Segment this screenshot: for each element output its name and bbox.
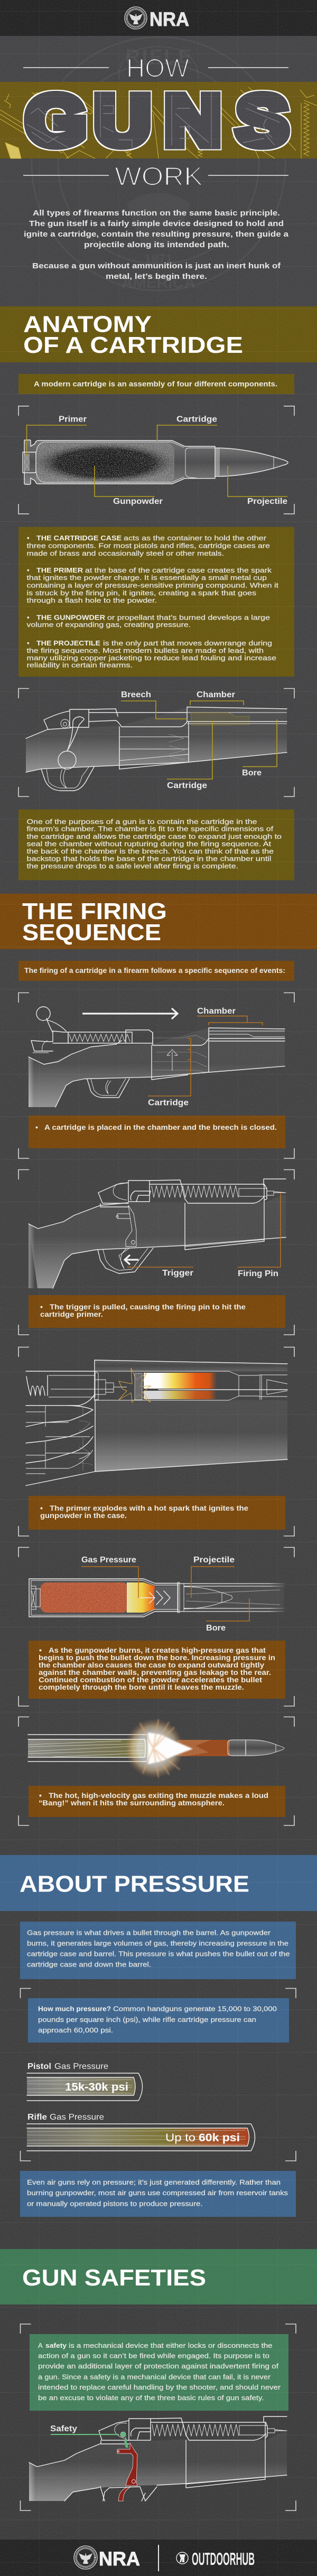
item: cartridge case: three components. For most pistols and rifles, cartridge cases are xyxy=(26,542,270,549)
NRA wordmark: NRA xyxy=(150,8,189,30)
bar label: rifle: Rifle xyxy=(27,2113,47,2122)
label: Safety: Safety xyxy=(50,2424,77,2433)
NRA wordmark: NRA xyxy=(99,2548,140,2570)
label: Cartridge: Cartridge xyxy=(148,1099,189,1107)
label: Projectile xyxy=(228,466,287,506)
label: Firing Pin: Firing Pin xyxy=(238,1269,278,1278)
text block: air guns: or manually operated pistons to produce pressure. xyxy=(27,2200,203,2208)
subheading: four components xyxy=(18,374,294,394)
bar: pistol gas pressure xyxy=(27,2073,143,2101)
subheading: sequence of events: The firing of a cartridge in a firearm follows a specific sequence of events: xyxy=(24,966,285,975)
caption: step 2: The trigger is pulled, causing the firing pin to hit the xyxy=(50,1303,246,1311)
step 5 diagram: muzzle blast xyxy=(18,1717,294,1825)
label: Breech: Breech xyxy=(121,690,151,699)
label: Firing Pin xyxy=(238,1193,281,1278)
title word: HOW: HOW xyxy=(126,54,190,82)
label: Trigger: Trigger xyxy=(162,1269,193,1278)
icon: Outdoor Hub xyxy=(176,2552,188,2564)
watermark seal: AMERICA xyxy=(122,274,195,292)
rifle illustration, firing xyxy=(29,1179,286,1288)
yellow blueprint band xyxy=(0,82,317,158)
item: gunpowder: THE GUNPOWDER xyxy=(36,614,106,622)
caption: step 1 xyxy=(29,1116,285,1148)
text block: chamber and breech: the back of the chamber is the breech. You can think of that as the xyxy=(26,847,274,855)
caption: step 2 xyxy=(29,1295,285,1328)
callout: how much pressure: Common handguns generate 15,000 to 30,000 xyxy=(113,2005,277,2012)
label: Cartridge xyxy=(157,415,217,441)
intro text: The gun itself is a fairly simple device designed to hold and xyxy=(29,219,284,228)
barrel and muzzle flash illustration xyxy=(28,1719,284,1778)
item: cartridge case xyxy=(26,534,270,557)
title rule lower xyxy=(23,175,288,176)
caption: step 1: A cartridge is placed in the chamber and the breech is closed. xyxy=(44,1123,277,1131)
item: projectile: reliability in certain firearms. xyxy=(26,661,133,669)
text block: gas pressure: cartridge case and barrel. This pressure is what pushes the bullet out of the xyxy=(27,1950,290,1958)
icon: NRA seal xyxy=(125,7,147,29)
label: Gas Pressure xyxy=(81,1556,138,1598)
watermark seal xyxy=(32,37,285,292)
bar: pistol gas pressure: 15k-30k psi xyxy=(65,2081,128,2093)
text block: what a safety is xyxy=(30,2334,288,2411)
caption: step 4: completely through the bore until it leaves the muzzle. xyxy=(39,1683,244,1691)
intro text: Because a gun without ammunition is just an inert hunk of xyxy=(32,261,281,270)
step 1 diagram: cartridge chambered xyxy=(18,993,294,1158)
caption: step 4: the chamber also causes the case to expand outward tightly xyxy=(39,1661,264,1669)
intro text: ignite a cartridge, contain the resulting pressure, then guide a xyxy=(24,230,289,239)
caption: step 4 xyxy=(29,1641,285,1699)
label: Chamber: Chamber xyxy=(197,690,235,699)
caption: step 1: • xyxy=(35,1123,38,1131)
text block: gas pressure: burns, it generates large volumes of gas, thereby increasing pressure in the xyxy=(27,1940,288,1947)
panel: component descriptions xyxy=(18,527,294,677)
heading: The Firing Sequence xyxy=(22,898,167,945)
footer bar xyxy=(0,2540,317,2576)
header bar xyxy=(0,0,317,36)
item: primer xyxy=(26,566,278,604)
arrow: trigger pull xyxy=(125,1255,138,1264)
callout: how much pressure: How much pressure? xyxy=(38,2005,111,2012)
watermark seal: 1871 xyxy=(144,252,173,266)
caption: step 3: • xyxy=(40,1504,43,1512)
rifle illustration xyxy=(26,707,287,791)
cartridge illustration xyxy=(23,440,288,484)
caption: step 3: The primer explodes with a hot spark that ignites the xyxy=(50,1504,248,1512)
item: gunpowder xyxy=(26,614,270,629)
item: cartridge case: acts as the container to hold the other xyxy=(124,534,267,542)
text block: chamber and breech: backstop that holds the base of the cartridge in the chamber until xyxy=(26,855,272,863)
item: gunpowder: or propellant that’s burned develops a large xyxy=(107,614,270,622)
text block: chamber and breech: the cartridge and allows the cartridge case to expand just enough to xyxy=(26,832,282,840)
watermark seal: RIFLE xyxy=(126,46,191,68)
label: Breech xyxy=(121,690,187,719)
item: projectile xyxy=(26,639,276,669)
item: primer: THE PRIMER xyxy=(36,566,83,574)
bar: rifle gas pressure xyxy=(27,2124,255,2151)
label: Bore xyxy=(242,719,277,778)
title: How Guns Work xyxy=(0,54,317,191)
label: Cartridge: Cartridge xyxy=(167,781,207,790)
heading: The Firing Sequence: SEQUENCE xyxy=(22,920,161,945)
label: Bore: Bore xyxy=(242,769,262,778)
item: gunpowder: • xyxy=(27,614,30,622)
panel: safety explanation and diagram xyxy=(20,2324,296,2511)
text block: what a safety is: safety xyxy=(45,2341,67,2349)
caption: step 4: begins to push the bullet down the bore. Increasing pressure in xyxy=(39,1653,275,1662)
subheading: four components: A modern cartridge is an assembly of four different components. xyxy=(34,379,277,388)
diagram: rifle parts xyxy=(18,689,294,797)
item: primer: containing a layer of pressure-sensitive priming compound. When it xyxy=(26,581,278,589)
label: Gas Pressure: Gas Pressure xyxy=(81,1556,136,1565)
intro text xyxy=(24,209,289,281)
item: projectile: • xyxy=(27,639,30,647)
caption: step 5: “Bang!” when it hits the surrounding atmosphere. xyxy=(39,1798,225,1807)
subheading: sequence of events xyxy=(18,961,294,981)
heading: Anatomy of a Cartridge xyxy=(23,312,243,358)
label: Primer xyxy=(26,415,87,456)
rifle action illustration with safety xyxy=(29,2416,287,2501)
bar label: pistol: Pistol xyxy=(27,2062,51,2071)
text block: chamber and breech: One of the purposes of a gun is to contain the cartridge in the xyxy=(26,818,257,826)
label: Gunpowder xyxy=(95,466,163,506)
label: Trigger xyxy=(127,1267,193,1278)
intro text: All types of firearms function on the same basic principle. xyxy=(33,209,280,218)
text block: chamber and breech: seal the chamber without rupturing during the firing sequence. At xyxy=(26,840,271,848)
label: Projectile xyxy=(191,1556,235,1598)
rifle illustration, bolt open xyxy=(29,1007,285,1107)
panel: how much pressure xyxy=(20,1988,296,2161)
bar: rifle gas pressure: 60k psi xyxy=(199,2131,240,2144)
text block: what a safety is: A xyxy=(38,2341,43,2349)
label: Cartridge xyxy=(148,1038,191,1107)
text block: what a safety is: is a mechanical device that either locks or disconnects the xyxy=(69,2341,273,2349)
text block: gas pressure: cartridge case and down the barrel. xyxy=(27,1961,151,1969)
OutdoorHub wordmark: OUTDOORHUB xyxy=(192,2549,255,2569)
callout: how much pressure xyxy=(28,1998,289,2043)
heading: Gun Safeties: GUN SAFETIES xyxy=(22,2265,206,2291)
panel: firing sequence heading band xyxy=(0,894,317,949)
text block: what a safety is: be an excuse to violate any of the three basic rules of gun safety. xyxy=(38,2394,264,2402)
text block: chamber and breech xyxy=(18,809,294,880)
item: primer: at the base of the cartridge case creates the spark xyxy=(85,566,272,574)
step 2 diagram: trigger pulled xyxy=(18,1169,294,1335)
label: Projectile: Projectile xyxy=(193,1556,235,1565)
caption: step 2: cartridge primer. xyxy=(40,1310,103,1318)
label: Safety xyxy=(50,2424,128,2448)
caption: step 4: • xyxy=(39,1646,42,1654)
text block: gas pressure: Gas pressure is what drives a bullet through the barrel. As gunpowder xyxy=(27,1929,271,1937)
text block: air guns: burning gunpowder, most air guns use compressed air from reservoir tanks xyxy=(27,2189,288,2197)
caption: step 5: • xyxy=(39,1791,42,1800)
callout: how much pressure: pounds per square inch (psi), while rifle cartridge pressure can xyxy=(38,2016,256,2024)
item: gunpowder: volume of expanding gas, creating pressure. xyxy=(26,621,191,629)
title rule upper xyxy=(23,67,288,68)
label: Chamber xyxy=(197,1007,263,1025)
text block: what a safety is: intended to replace careful handling by the shooter, and should never xyxy=(38,2383,281,2391)
text block: what a safety is: action of a gun so it can’t be fired while engaged. Its purpose is to xyxy=(38,2352,269,2359)
item: cartridge case: made of brass and occasionally steel or other metals. xyxy=(26,549,224,557)
step 4 diagram: gas pressure xyxy=(18,1548,294,1706)
caption: step 5 xyxy=(29,1786,285,1817)
caption: step 3 xyxy=(29,1496,285,1530)
item: projectile: many utilizing copper jacketing to reduce lead fouling and increase xyxy=(26,654,276,662)
label: Bore xyxy=(206,1598,249,1633)
bar label: rifle xyxy=(27,2113,104,2122)
caption: step 5: The hot, high-velocity gas exiting the muzzle makes a loud xyxy=(49,1791,268,1800)
panel: anatomy heading band xyxy=(0,306,317,362)
item: cartridge case: THE CARTRIDGE CASE xyxy=(36,534,122,542)
item: primer: that ignites the powder charge. It is essentially a small metal cup xyxy=(26,574,267,582)
heading: The Firing Sequence: THE FIRING xyxy=(22,898,167,924)
label: Chamber: Chamber xyxy=(197,1007,236,1016)
label: Primer: Primer xyxy=(59,415,87,424)
item: primer: • xyxy=(27,566,30,574)
label: Cartridge: Cartridge xyxy=(176,415,217,424)
heading: Anatomy of a Cartridge: OF A CARTRIDGE xyxy=(23,332,243,358)
text block: air guns xyxy=(20,2171,296,2217)
icon: NRA seal xyxy=(74,2546,97,2569)
caption: step 3: gunpowder in the case. xyxy=(40,1511,127,1520)
heading: About Pressure: ABOUT PRESSURE xyxy=(20,1871,249,1897)
label: Chamber xyxy=(190,690,244,705)
heading: Anatomy of a Cartridge: ANATOMY xyxy=(23,312,152,338)
text block: air guns: Even air guns rely on pressure; it’s just generated differently. Rather than xyxy=(27,2178,281,2186)
item: projectile: THE PROJECTILE xyxy=(36,639,100,647)
bar: rifle gas pressure: Up to xyxy=(165,2131,195,2144)
diagram: cartridge anatomy xyxy=(18,406,294,514)
bar label: rifle: Gas Pressure xyxy=(50,2113,104,2122)
text block: what a safety is: a gun. Since a safety is a mechanical device that can fail, it is never xyxy=(38,2373,271,2381)
label: Gunpowder: Gunpowder xyxy=(113,497,163,506)
caption: step 4: Continued combustion of the powder accelerates the bullet xyxy=(39,1675,262,1684)
bar label: pistol: Gas Pressure xyxy=(54,2062,108,2071)
title word: WORK: WORK xyxy=(115,163,203,191)
panel: about pressure heading band xyxy=(0,1855,317,1911)
cartridge firing illustration xyxy=(29,1579,285,1617)
label: Cartridge xyxy=(167,721,212,790)
arrow: bolt forward xyxy=(82,1008,178,1019)
item: projectile: the firing sequence. Most modern bullets are made of lead, with xyxy=(26,647,264,654)
label: Projectile: Projectile xyxy=(247,497,287,506)
rifle close-up illustration xyxy=(26,1360,287,1485)
caption: step 4: As the gunpowder burns, it creates high-pressure gas that xyxy=(49,1646,266,1654)
text block: what a safety is: provide an additional layer of protection against inadvertent firing of xyxy=(38,2362,278,2370)
title word: GUNS: GUNS xyxy=(25,80,288,160)
item: primer: through a flash hole to the powder. xyxy=(26,596,157,604)
caption: step 2: • xyxy=(40,1303,43,1311)
label: Bore: Bore xyxy=(206,1624,226,1633)
intro text: projectile along its intended path. xyxy=(84,240,229,249)
text block: chamber and breech: firearm’s chamber. The chamber is fit to the specific dimensions of xyxy=(26,825,273,833)
text block: gas pressure xyxy=(20,1922,296,1979)
step 3 diagram: primer ignites xyxy=(18,1347,294,1536)
panel: gun safeties heading band xyxy=(0,2249,317,2305)
text block: chamber and breech: the pressure drops to a safe level after firing is complete. xyxy=(26,862,238,870)
intro text: metal, let’s begin there. xyxy=(106,272,207,281)
caption: step 4: against the chamber walls, preventing gas leakage to the rear. xyxy=(39,1668,271,1676)
callout: how much pressure: approach 60,000 psi. xyxy=(38,2026,113,2034)
bar label: pistol xyxy=(27,2062,108,2071)
item: cartridge case: • xyxy=(27,534,30,542)
item: projectile: is the only part that moves downrange during xyxy=(103,639,272,647)
item: primer: is struck by the firing pin, it ignites, creating a spark that goes xyxy=(26,589,257,597)
